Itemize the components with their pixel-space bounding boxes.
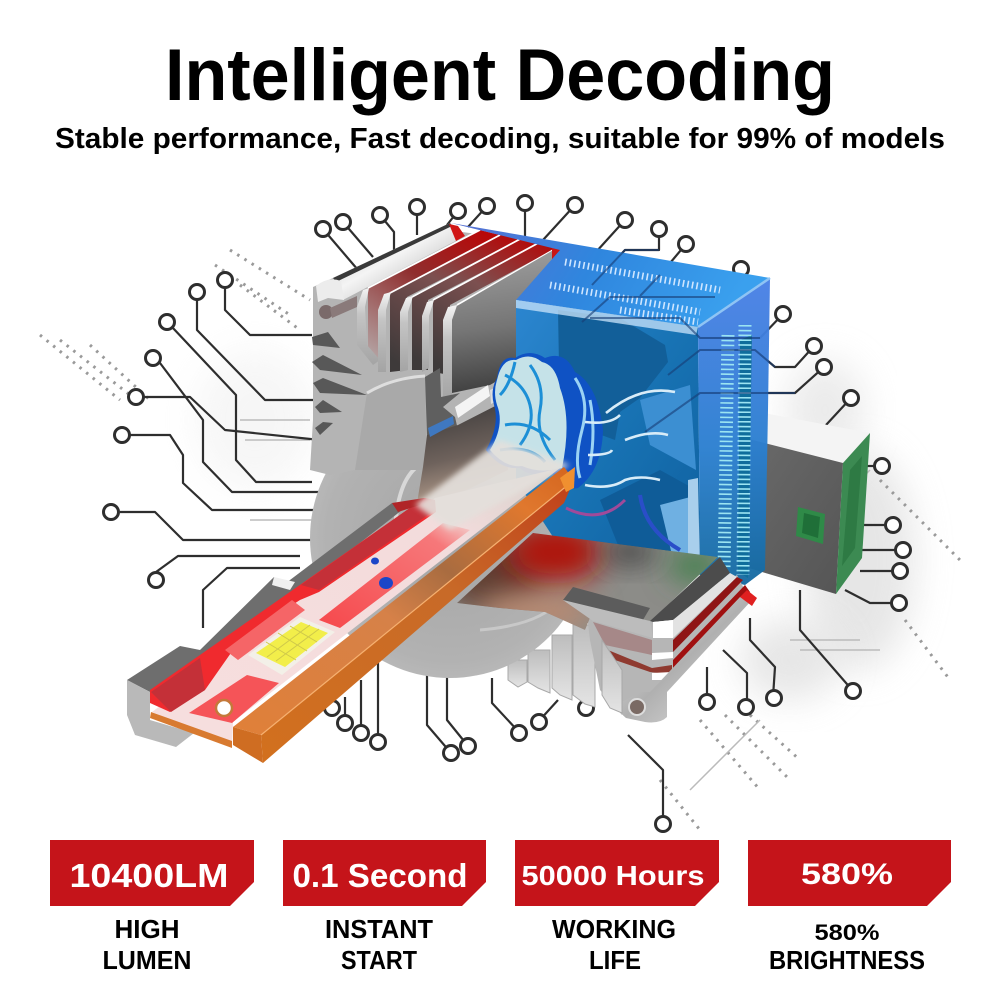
fin slots [368,230,500,365]
circuit traces and terminals [120,203,903,824]
orange plate edge [150,712,232,748]
cube edge highlight [698,278,770,327]
LED chip [248,617,335,675]
dark red blocks [151,498,435,712]
blue serial strip [428,416,454,437]
top plate with colour wash [457,533,718,630]
left red stripe [150,498,436,712]
red fin strips [673,577,743,652]
lower heat sink [445,520,757,722]
stat: brightness [748,840,951,975]
stat: instant start: START [341,945,417,975]
stat: brightness: 580% [814,920,880,945]
stat: brightness: 580% [801,858,893,891]
lower rail [620,597,752,722]
copper bar top [233,467,574,735]
blue dots [371,558,393,589]
stat: high lumen [50,840,254,975]
blue decoder cube [451,223,795,585]
pink strip [225,600,305,660]
top rail [333,223,465,300]
disc shoulder [355,376,427,470]
subtitle: Stable performance, Fast decoding, suitable for 99% of models [55,123,945,155]
USB connector [722,405,870,594]
grey circuit board background [40,250,960,830]
translucent haze [415,440,570,530]
big grey face [452,245,562,393]
plate step [563,587,650,625]
speckled grey block [425,368,460,435]
stat: instant start [283,840,486,975]
cube top face [451,223,770,327]
heat sink disc [310,398,590,678]
bulb arm [127,440,575,763]
stat: high lumen: HIGH [114,914,180,944]
stat: high lumen: LUMEN [102,945,192,975]
near fin [602,640,622,713]
central block [415,402,508,515]
rail hook [316,279,344,302]
fan blade [558,310,668,440]
mount hole [216,700,232,716]
cube right face [698,278,770,585]
plate [152,468,560,745]
fin top edges [368,230,562,305]
side slots [312,332,367,435]
stat: instant start: 0.1 Second [292,857,468,894]
stat: working life: LIFE [589,945,641,975]
copper bar side [261,480,574,763]
brain blob [486,353,603,489]
stat: high lumen: 10400LM [70,857,228,894]
grey end block [127,680,194,747]
title: Intelligent Decoding [165,35,835,116]
copper bar front [233,727,263,763]
stat: working life: WORKING [552,914,676,944]
upper fin strip [653,573,737,638]
lower disc fins [508,625,595,707]
cube front face [516,300,700,575]
red plates [319,523,470,628]
terminal rings [104,196,910,832]
fin near strips [357,288,457,400]
stat: instant start: INSTANT [325,914,433,944]
grey strip [127,503,402,692]
white bracket [455,385,490,418]
stat: brightness: BRIGHTNESS [769,945,925,975]
stat: working life: 50000 Hours [522,860,704,891]
wires [585,391,675,487]
stat: working life [515,840,719,975]
traces seen through the cube [582,250,795,432]
upper heat sink [310,223,562,515]
